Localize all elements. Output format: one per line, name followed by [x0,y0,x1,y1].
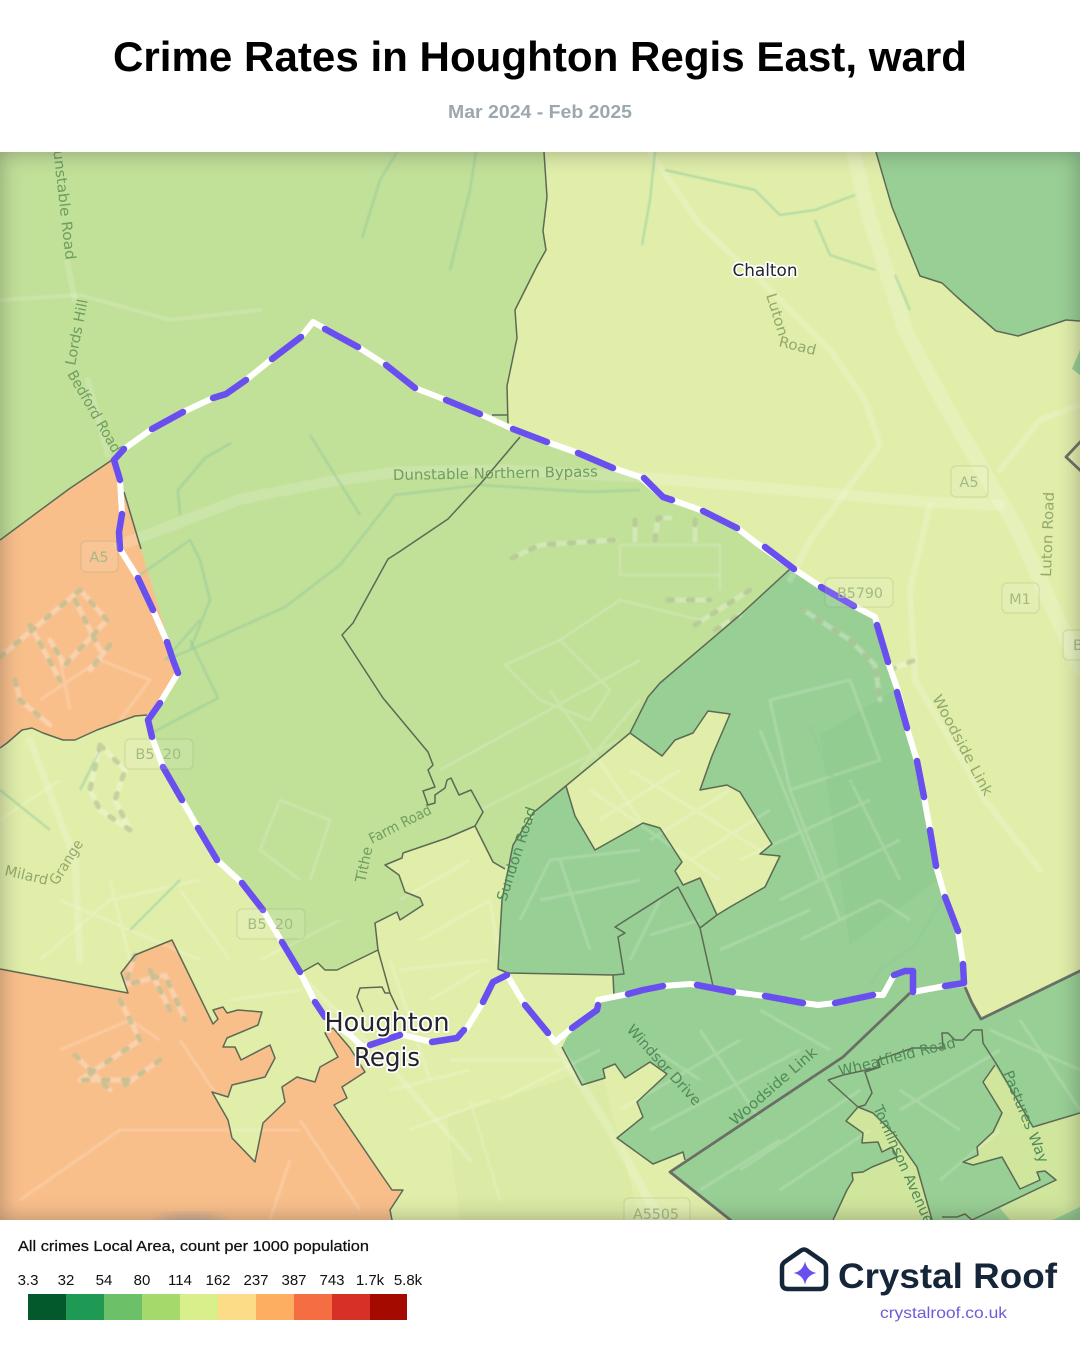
legend tick values: 80 [134,1272,150,1289]
grey smudge at bottom edge [154,1211,226,1220]
website link: crystalroof.co.uk [880,1305,1008,1322]
road label: Luton Road north: Luton [762,291,790,338]
road shield: A5505 [624,1198,690,1220]
road shield: clipped east [1063,630,1080,660]
major roads [0,152,1080,1220]
road shield: B5120 south [237,909,305,939]
region: darker band east [820,690,937,945]
road shield: B5120 south: 20 [275,917,293,933]
region: east of ward, dark green [630,569,964,1005]
road label: Woodside Link south: Woodside Link [727,1044,821,1129]
place label: Houghton Regis: Houghton [324,1008,450,1038]
road shield: B5120 south: B5 [247,917,267,933]
place label: Chalton: Chalton [732,261,798,280]
residential streets [0,545,1080,1220]
road label: Sundon Road: Sundon Road [495,805,540,903]
logo: Crystal Roof [782,1250,1057,1322]
road label: Bedford Road: Bedford Road [64,368,123,456]
road shield: M1 [1002,583,1039,613]
icon: house with star [782,1250,826,1289]
legend title: All crimes Local Area, count per 1000 population [18,1238,369,1255]
legend tick values: 5.8k [394,1272,423,1289]
road shield: B5790 [825,578,893,607]
thin area boundaries [0,152,1080,1220]
legend tick values: 1.7k [356,1272,385,1289]
road shield: A5 west: A5 [89,550,109,566]
legend [18,1238,423,1320]
road label: Windsor Drive: Windsor Drive [623,1022,704,1109]
legend tick values: 743 [319,1272,345,1289]
ward boundary: purple dashes [114,329,964,1045]
region: central dark green [498,786,717,997]
road label: Pastures Way: Pastures Way [999,1069,1051,1166]
road shield: A5 east [951,466,988,497]
base area: light green [0,152,1080,1220]
place label: Houghton Regis [324,1008,450,1073]
road label: Dunstable Road: Dunstable Road [48,138,78,261]
road shield: B5120 west [125,739,193,769]
legend tick values: 54 [96,1272,112,1289]
thick district boundaries [670,440,1080,1222]
estate track clusters [0,518,915,1090]
road label: Tithe Farm Road: Farm Road [367,802,434,848]
region: south woodland patch [447,1067,640,1220]
road shield: A5 east: A5 [959,475,979,491]
region: Tomlinson light patch [833,1107,932,1220]
road shield: M1: M1 [1009,592,1031,608]
road label: Milard Grange [5,841,83,885]
region: far-east fragment [1072,350,1080,375]
road label: Milard Grange: Milard [3,863,50,889]
road label: Wheatfield Road: Wheatfield Road [837,1035,957,1080]
legend tick values: 237 [243,1272,269,1289]
road label: Tithe Farm Road: Tithe [353,845,376,885]
road label: Lords Hill: Lords Hill [63,298,92,367]
legend tick values: 387 [281,1272,307,1289]
road shield: B5120 west: 20 [163,747,181,763]
legend tick values: 3.3 [18,1272,38,1289]
region: south-west orange [0,940,403,1220]
region: north-west mid green [0,152,790,972]
map edge vignette [0,152,1080,1220]
legend tick values: 162 [205,1272,231,1289]
road label: Dunstable Northern Bypass: Dunstable Northern Bypass [393,464,598,484]
ward boundary: white casing [114,322,964,1047]
road shield: A5505: A5505 [633,1207,679,1223]
road shield: B5120 west: B5 [135,747,155,763]
road label: Tomlinson Avenue: Tomlinson Avenue [869,1102,936,1227]
legend colour bar [28,1294,407,1320]
road label: Tithe Farm Road [353,802,434,885]
region: Pastures light patch [963,1065,1080,1220]
road label: Milard Grange: Grange [47,837,87,888]
region: north-east dark green [876,152,1080,336]
region: below ward dark green [562,971,913,1164]
place label: Houghton Regis: Regis [354,1043,420,1073]
road label: Luton Road north: Road [777,334,818,359]
road shield: A5 west [81,541,118,572]
road label: Luton Road east: Luton Road [1039,492,1058,577]
region: south-east dark green [670,970,1080,1220]
road shield: B5790: B5790 [837,586,883,602]
legend tick values [18,1272,423,1289]
region: north-west orange [0,460,178,748]
logo wordmark: Crystal Roof [838,1257,1057,1296]
legend tick values: 114 [168,1272,192,1289]
waterways [0,152,945,985]
road label: Luton Road north [766,294,816,355]
legend tick values: 32 [58,1272,74,1289]
road label: Woodside Link east: Woodside Link [928,692,995,799]
title: Crime Rates in Houghton Regis East, ward [113,33,967,80]
subtitle: date range: Mar 2024 - Feb 2025 [448,102,632,122]
